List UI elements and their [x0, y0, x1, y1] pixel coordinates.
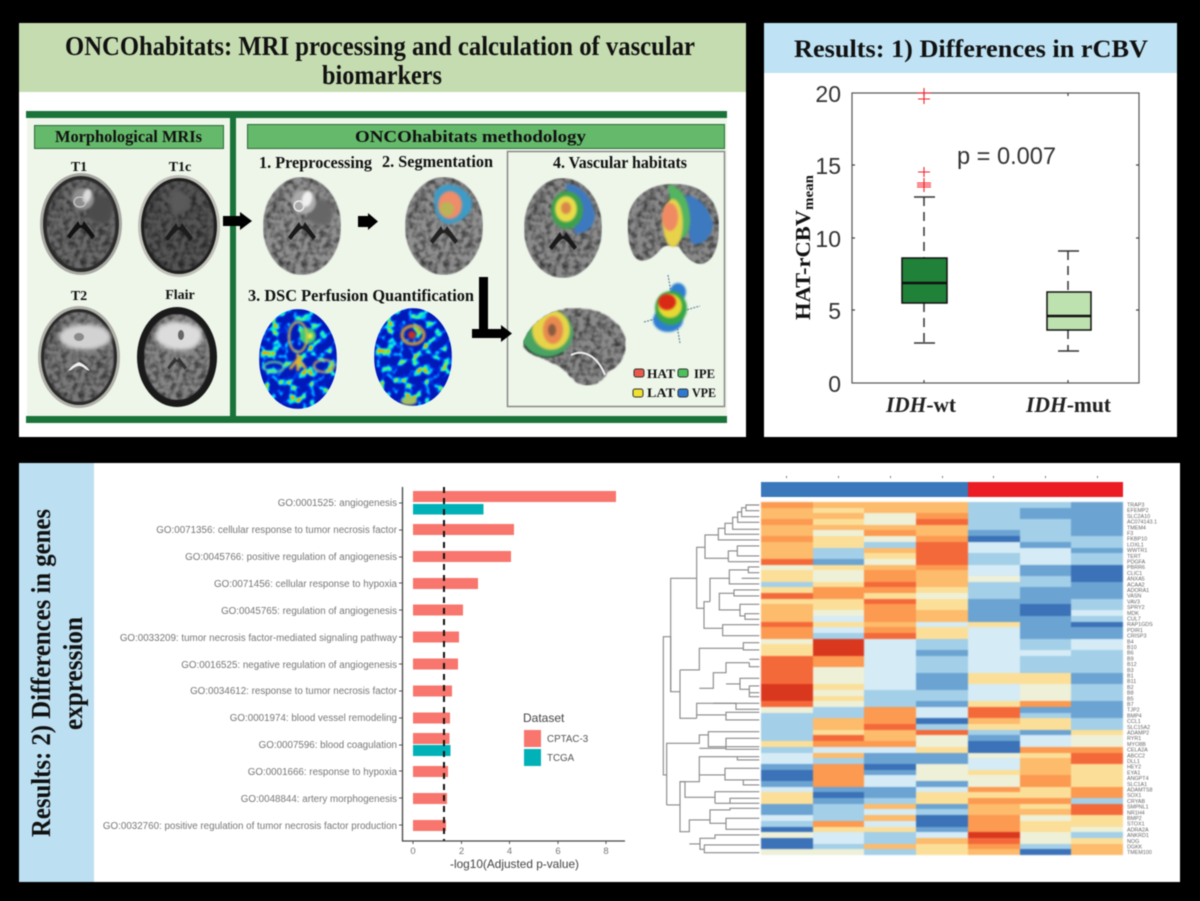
heatmap gene labels: NOG: [1127, 839, 1139, 845]
legend: habitats: HAT: [647, 367, 676, 381]
heatmap gene labels: BMP4: [1127, 713, 1142, 719]
brain: T2: [38, 306, 120, 408]
heatmap gene labels: TJP2: [1127, 708, 1140, 714]
heatmap gene labels: HEY2: [1127, 765, 1141, 771]
heatmap gene labels: WWTR1: [1127, 548, 1147, 554]
x axis tick labels: [410, 846, 609, 857]
legend: habitats: VPE: [692, 386, 716, 400]
heatmap gene labels: BMP2: [1127, 816, 1142, 822]
heading: 4. Vascular habitats: 4. Vascular habitats: [553, 153, 688, 172]
category labels: GO:0007596: blood coagulation: [259, 740, 397, 751]
category labels: GO:0034612: response to tumor necrosis factor: [190, 686, 398, 697]
heatmap gene labels: TRAP3: [1127, 502, 1144, 508]
heatmap gene labels: VASN: [1127, 594, 1141, 600]
heading: Differences in rCBV: [764, 23, 1177, 73]
heading: ONCOhabitats methodology: ONCOhabitats methodology: [355, 127, 587, 146]
heatmap gene labels: SMPNL1: [1127, 805, 1149, 811]
map: DSC perfusion 2: [374, 308, 452, 406]
heatmap gene labels: B11: [1127, 679, 1136, 685]
heading: Differences in rCBV: Results: 1) Differences in rCBV: [794, 36, 1148, 63]
category labels: GO:0001525: angiogenesis: [278, 498, 397, 509]
label: 2. Segmentation: 2. Segmentation: [382, 152, 493, 171]
significance threshold line: [443, 487, 445, 841]
heatmap gene labels: SLC1A1: [1127, 782, 1147, 788]
heatmap gene labels: TERT: [1127, 554, 1142, 560]
heatmap gene labels: ANGPT4: [1127, 776, 1149, 782]
heading: ONCOhabitats methodology: [248, 124, 724, 148]
heatmap gene labels: B2: [1127, 685, 1134, 691]
p-value annotation: p = 0.007: [957, 144, 1056, 170]
category labels: [103, 498, 398, 832]
heatmap gene labels: CRISP3: [1127, 634, 1146, 640]
category labels: GO:0071456: cellular response to hypoxia: [214, 579, 398, 590]
heatmap gene labels: B6: [1127, 651, 1134, 657]
heading: Differences in genes expression: expression: [58, 617, 88, 730]
heatmap gene labels: B12: [1127, 662, 1137, 668]
heatmap gene labels: B5: [1127, 696, 1134, 702]
y axis tick labels: 20: [815, 81, 841, 107]
brain: preprocessing: [263, 177, 341, 275]
dendrogram: gene clustering: [663, 505, 759, 853]
heatmap group bar: [761, 482, 1123, 497]
heatmap gene labels: [1127, 502, 1157, 856]
box: IDH-wt: [902, 88, 947, 343]
heatmap gene labels: ADRA2A: [1127, 827, 1149, 833]
arrow: perfusion to vascular habitats: [472, 277, 512, 342]
y axis tick labels: 10: [815, 226, 841, 252]
x axis tick labels: 0: [410, 846, 416, 857]
heatmap gene labels: NR1H4: [1127, 810, 1145, 816]
arrow: morphological to methodology: [223, 212, 252, 230]
heading: Differences in genes expression: Results: 2) Differences in genes: [26, 509, 56, 837]
heatmap gene labels: VAV3: [1127, 599, 1140, 605]
label: 1. Preprocessing: 1. Preprocessing: [259, 153, 373, 172]
bars: [413, 491, 616, 831]
legend: dataset: Dataset: [523, 711, 565, 725]
label: T1c: T1c: [169, 160, 191, 175]
heatmap gene labels: ADAMP2: [1127, 730, 1149, 736]
category labels: GO:0001974: blood vessel remodeling: [230, 713, 397, 724]
category labels: GO:0045766: positive regulation of angiogenesis: [185, 552, 397, 563]
heatmap gene labels: CRYAB: [1127, 799, 1145, 805]
heatmap gene labels: PBRR6: [1127, 565, 1145, 571]
box: IDH-mut: [1047, 251, 1091, 351]
heatmap gene labels: ANKRD1: [1127, 833, 1149, 839]
category labels: GO:0071356: cellular response to tumor necrosis factor: [156, 525, 398, 536]
brain: axial habitats: [524, 178, 602, 278]
heatmap gene labels: B1: [1127, 674, 1134, 680]
panel: gene expression results: [19, 463, 1180, 882]
heading: MRI processing title band: biomarkers: [322, 59, 442, 90]
heatmap gene labels: RAP1GDS: [1127, 622, 1153, 628]
category labels: GO:0032760: positive regulation of tumor necrosis factor production: [103, 821, 397, 832]
category labels: GO:0048844: artery morphogenesis: [241, 794, 397, 805]
panel: rCBV results: [764, 23, 1177, 437]
heatmap gene labels: RYR1: [1127, 736, 1141, 742]
brain: coronal habitats: [628, 184, 719, 264]
panel: MRI processing: [19, 23, 746, 437]
heatmap gene labels: SOX1: [1127, 793, 1141, 799]
heatmap gene labels: B9: [1127, 656, 1134, 662]
brain: T1: [40, 173, 122, 275]
heatmap gene labels: FKBP10: [1127, 537, 1147, 543]
x axis tick labels: 4: [507, 846, 512, 857]
heatmap gene labels: DLL1: [1127, 759, 1140, 765]
heatmap gene labels: AC074143.1: [1127, 520, 1157, 526]
heatmap gene labels: EYA1: [1127, 770, 1140, 776]
legend: dataset: [523, 711, 589, 766]
heatmap gene labels: B10: [1127, 645, 1137, 651]
heading: Differences in genes expression: [19, 463, 94, 882]
heatmap gene labels: TMEM100: [1127, 850, 1152, 856]
y axis tick labels: 5: [828, 298, 841, 324]
heatmap gene labels: TMEM4: [1127, 525, 1146, 531]
heading: Morphological MRIs: Morphological MRIs: [55, 127, 202, 146]
heatmap gene labels: SLC2A10: [1127, 514, 1150, 520]
y axis tick labels: [815, 81, 841, 397]
legend: habitats: [633, 367, 716, 400]
heatmap gene labels: F3: [1127, 531, 1133, 537]
heatmap gene labels: SLC15A2: [1127, 725, 1150, 731]
heatmap gene labels: B4: [1127, 639, 1134, 645]
legend: dataset: TCGA: [547, 753, 575, 764]
legend: habitats: IPE: [694, 367, 715, 381]
heatmap gene labels: B3: [1127, 668, 1134, 674]
3D tumour rendering: [644, 275, 700, 343]
heading: Morphological MRIs: [34, 126, 224, 148]
brain: sagittal habitats: [521, 308, 626, 385]
legend: habitats: LAT: [647, 386, 676, 400]
category labels: GO:0001666: response to hypoxia: [248, 767, 398, 778]
x axis tick labels: 8: [603, 846, 609, 857]
heatmap gene labels: ADORA1: [1127, 588, 1149, 594]
category labels: GO:0045765: regulation of angiogenesis: [221, 606, 397, 617]
heatmap gene labels: PDIR1: [1127, 628, 1143, 634]
workflow frame: [26, 111, 727, 423]
label: Flair: Flair: [165, 288, 195, 303]
x axis labels: [885, 392, 1111, 417]
heatmap gene labels: B7: [1127, 702, 1134, 708]
category labels: GO:0016525: negative regulation of angiogenesis: [181, 660, 397, 671]
label: T1: T1: [71, 160, 87, 175]
chart: GO enrichment bar chart: [103, 487, 625, 871]
heatmap annotation dots: [786, 476, 1098, 478]
y axis tick labels: 0: [828, 371, 841, 397]
heatmap gene labels: LOXL1: [1127, 542, 1144, 548]
x axis tick labels: 6: [555, 846, 561, 857]
heatmap gene labels: MDK: [1127, 611, 1139, 617]
brain: Flair: [137, 307, 217, 407]
axes: [402, 487, 625, 841]
x axis labels: IDH-wt: [885, 392, 956, 417]
heatmap gene labels: DGKK: [1127, 844, 1143, 850]
heatmap gene labels: ANXA5: [1127, 577, 1145, 583]
label: T2: T2: [71, 289, 87, 304]
heatmap gene labels: CELA2A: [1127, 748, 1148, 754]
heatmap gene labels: ABCC2: [1127, 753, 1145, 759]
brain: segmentation: [405, 177, 483, 275]
heatmap gene labels: SPRY2: [1127, 605, 1145, 611]
brain: T1c: [138, 175, 220, 277]
heatmap gene labels: MYO8B: [1127, 742, 1146, 748]
category labels: GO:0033209: tumor necrosis factor-mediated signaling pathway: [120, 633, 397, 644]
y axis tick labels: 15: [815, 153, 841, 179]
panel: vascular habitats: [508, 152, 724, 406]
heatmap gene labels: EFEMP2: [1127, 508, 1149, 514]
map: DSC perfusion 1: [259, 309, 337, 409]
y axis title: mean: [802, 175, 817, 210]
heatmap gene labels: ACAA2: [1127, 582, 1145, 588]
arrow: preprocessing to segmentation: [358, 213, 378, 230]
y axis title: HAT-rCBV: [791, 217, 815, 320]
x axis tick labels: 2: [459, 846, 464, 857]
label: 3. DSC Perfusion Quantification: 3. DSC Perfusion Quantification: [248, 286, 474, 305]
x axis title: -log10(Adjusted p-value): [450, 858, 579, 871]
heatmap gene labels: ADAMTS8: [1127, 788, 1152, 794]
heading: MRI processing title band: [19, 23, 746, 92]
heatmap gene labels: B8: [1127, 691, 1134, 697]
x axis labels: IDH-mut: [1025, 392, 1111, 417]
heatmap gene labels: CUL7: [1127, 616, 1141, 622]
chart: rCBV boxplot: [791, 81, 1139, 417]
heatmap gene labels: STOX1: [1127, 822, 1145, 828]
legend: dataset: CPTAC-3: [547, 734, 589, 745]
heatmap gene labels: CLIC1: [1127, 571, 1142, 577]
heading: MRI processing title band: ONCOhabitats: MRI processing and calculation of vascular: [65, 30, 695, 61]
heatmap gene labels: CCL1: [1127, 719, 1141, 725]
heatmap gene labels: PDGFA: [1127, 560, 1146, 566]
heatmap: gene expression: [760, 501, 1124, 856]
